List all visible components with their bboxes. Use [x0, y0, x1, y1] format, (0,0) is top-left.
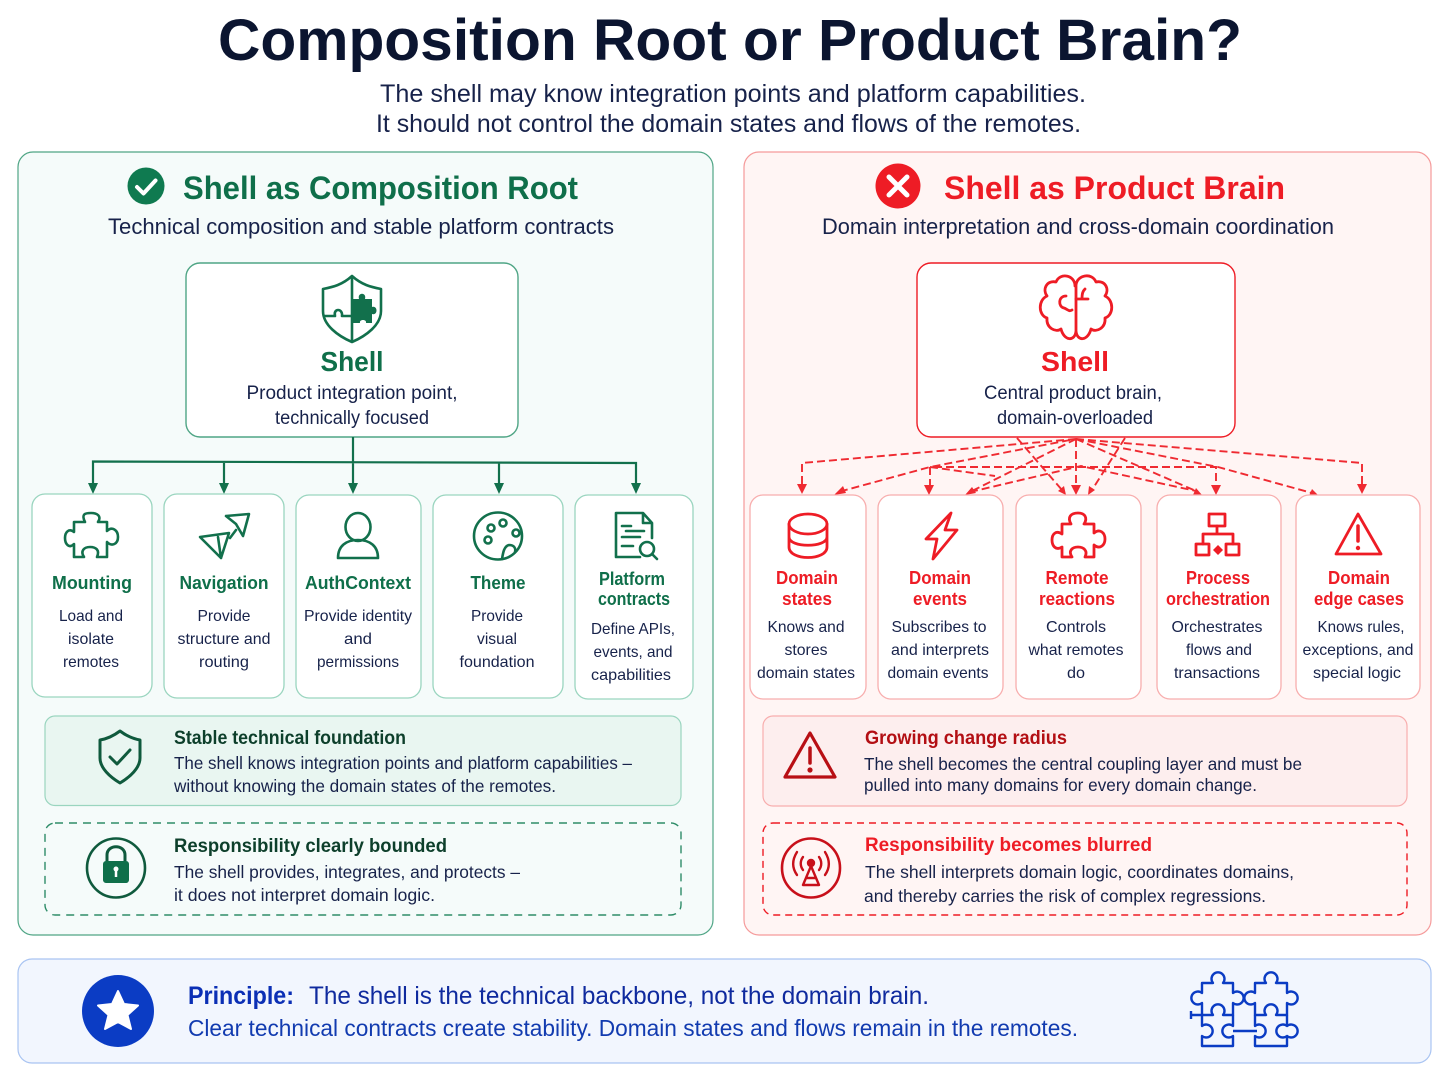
card description: do: [1067, 665, 1085, 682]
card description: flows and: [1186, 642, 1252, 659]
shell description: Product integration point,: [246, 383, 458, 404]
icon: paper planes: [200, 514, 249, 558]
card description: domain events: [888, 665, 988, 682]
card description: domain states: [757, 665, 855, 682]
card description: Provide: [471, 608, 523, 625]
card description: [1302, 619, 1414, 682]
card title: [1314, 568, 1404, 609]
shell description: technically focused: [275, 408, 429, 429]
card title: edge cases: [1314, 589, 1404, 609]
shell label: Shell: [1041, 346, 1109, 377]
card: domain edge cases: [1296, 495, 1420, 699]
callout text: [174, 862, 520, 905]
card title: Domain: [909, 568, 971, 588]
icon: brain: [1040, 276, 1112, 339]
card title: Theme: [470, 573, 526, 593]
card title: reactions: [1039, 589, 1115, 609]
icon: red cross: [876, 164, 920, 208]
card title: [776, 568, 838, 609]
panel: shell as product brain: [744, 152, 1431, 935]
card description: structure and: [178, 631, 270, 648]
card: remote reactions: [1016, 495, 1141, 699]
card title: AuthContext: [305, 573, 411, 593]
shell description: [984, 383, 1162, 429]
icon: star badge: [82, 975, 154, 1047]
card title: [1166, 568, 1270, 609]
card title: contracts: [598, 589, 670, 609]
panel subheading: Technical composition and stable platform contracts: [108, 214, 614, 239]
card description: transactions: [1174, 665, 1260, 682]
panel: shell as composition root: [18, 152, 713, 935]
card description: foundation: [460, 654, 534, 671]
card description: permissions: [317, 654, 399, 671]
card description: visual: [477, 631, 517, 648]
card description: and: [344, 631, 372, 648]
card title: Remote: [1046, 568, 1108, 588]
principle statement: The shell is the technical backbone, not the domain brain.: [309, 982, 929, 1010]
card: domain events: [878, 495, 1003, 699]
card description: Subscribes to: [892, 619, 987, 636]
card description: [1028, 619, 1124, 682]
panel: principle footer: [18, 959, 1431, 1063]
callout text: The shell knows integration points and platform capabilities –: [174, 753, 632, 773]
card description: Orchestrates: [1172, 619, 1262, 636]
card description: [178, 608, 270, 671]
callout text: and thereby carries the risk of complex regressions.: [864, 886, 1266, 906]
card description: [1172, 619, 1262, 682]
card title: Process: [1186, 568, 1250, 588]
card: theme: [433, 495, 563, 698]
card description: Define APIs,: [591, 621, 675, 638]
card title: Navigation: [180, 573, 268, 593]
subtitle: [376, 80, 1086, 138]
card: authcontext: [296, 495, 421, 698]
card description: [304, 608, 412, 671]
shell label: Shell: [320, 346, 384, 377]
icon: document with magnifier: [616, 513, 657, 559]
callout text: The shell becomes the central coupling layer and must be: [864, 754, 1302, 774]
title: Composition Root or Product Brain?: [218, 8, 1242, 73]
card description: [59, 608, 123, 671]
callout: stable technical foundation: [45, 716, 681, 806]
card description: capabilities: [591, 667, 671, 684]
icon: lightning bolt: [926, 513, 957, 559]
shell description: Central product brain,: [984, 383, 1162, 404]
icon: shield check: [100, 731, 140, 783]
card description: exceptions, and: [1302, 642, 1414, 659]
card description: [888, 619, 989, 682]
card description: stores: [784, 642, 828, 659]
callout: responsibility clearly bounded: [45, 823, 681, 915]
principle supporting text: Clear technical contracts create stability. Domain states and flows remain in the remotes.: [188, 1015, 1078, 1041]
icon: connected puzzle pieces: [1191, 972, 1298, 1046]
card description: events, and: [594, 644, 672, 661]
icon: warning triangle: [785, 733, 835, 777]
card description: routing: [199, 654, 249, 671]
card description: Knows rules,: [1318, 619, 1404, 636]
icon: green check: [128, 168, 164, 204]
callout text: [864, 754, 1302, 795]
shell description: domain-overloaded: [997, 408, 1153, 429]
subtitle: It should not control the domain states and flows of the remotes.: [376, 110, 1081, 138]
icon: org chart: [1196, 514, 1239, 555]
card description: Provide: [198, 608, 251, 625]
card: platform contracts: [575, 495, 693, 699]
card description: what remotes: [1028, 642, 1124, 659]
callout text: [864, 862, 1294, 906]
callout: responsibility becomes blurred: [763, 823, 1407, 915]
card title: Mounting: [52, 573, 132, 593]
card description: Knows and: [768, 619, 844, 636]
card: domain states: [750, 495, 866, 699]
callout: growing change radius: [763, 716, 1407, 806]
card: navigation: [164, 494, 284, 698]
callout text: The shell interprets domain logic, coordinates domains,: [865, 862, 1294, 882]
card description: isolate: [68, 631, 114, 648]
icon: database: [789, 514, 827, 558]
icon: lock: [87, 838, 145, 898]
card: mounting: [32, 494, 152, 697]
card description: [757, 619, 855, 682]
callout title: Growing change radius: [865, 727, 1067, 749]
card title: [598, 569, 670, 609]
panel heading: Shell as Composition Root: [183, 170, 578, 206]
shell card: [186, 263, 518, 437]
card title: states: [782, 589, 832, 609]
card title: [1039, 568, 1115, 609]
card title: Platform: [599, 569, 665, 589]
callout title: Responsibility clearly bounded: [174, 835, 447, 857]
card: process orchestration: [1157, 495, 1281, 699]
card description: Provide identity: [304, 608, 412, 625]
callout text: pulled into many domains for every domain change.: [864, 775, 1257, 795]
icon: puzzle piece: [1052, 513, 1105, 557]
subtitle: The shell may know integration points and platform capabilities.: [380, 80, 1086, 108]
card description: Controls: [1046, 619, 1106, 636]
shell card: [917, 263, 1235, 437]
callout title: Responsibility becomes blurred: [865, 834, 1152, 856]
panel heading: Shell as Product Brain: [944, 170, 1285, 206]
icon: warning triangle: [1336, 514, 1381, 554]
arrows: tangled dashed dependencies: [797, 438, 1367, 496]
callout title: Stable technical foundation: [174, 727, 406, 749]
shell description: [246, 383, 458, 429]
callout text: without knowing the domain states of the remotes.: [173, 776, 556, 796]
callout text: [173, 753, 632, 796]
card title: Domain: [776, 568, 838, 588]
icon: broadcast tower: [782, 838, 840, 898]
icon: shield with puzzle piece: [323, 276, 381, 342]
principle label: Principle:: [188, 982, 294, 1010]
icon: palette: [474, 512, 522, 560]
arrows: shell to capabilities: [88, 437, 641, 494]
callout text: The shell provides, integrates, and protects –: [174, 862, 520, 882]
card description: and interprets: [891, 642, 989, 659]
icon: puzzle piece: [65, 513, 118, 557]
card title: [909, 568, 971, 609]
panel subheading: Domain interpretation and cross-domain coordination: [822, 214, 1334, 239]
card description: Load and: [59, 608, 123, 625]
icon: person: [338, 513, 378, 558]
card description: remotes: [63, 654, 119, 671]
card title: Domain: [1328, 568, 1390, 588]
card description: [591, 621, 675, 684]
card description: special logic: [1313, 665, 1401, 682]
callout text: it does not interpret domain logic.: [174, 885, 435, 905]
card title: orchestration: [1166, 589, 1270, 609]
card title: events: [913, 589, 967, 609]
card description: [460, 608, 534, 671]
